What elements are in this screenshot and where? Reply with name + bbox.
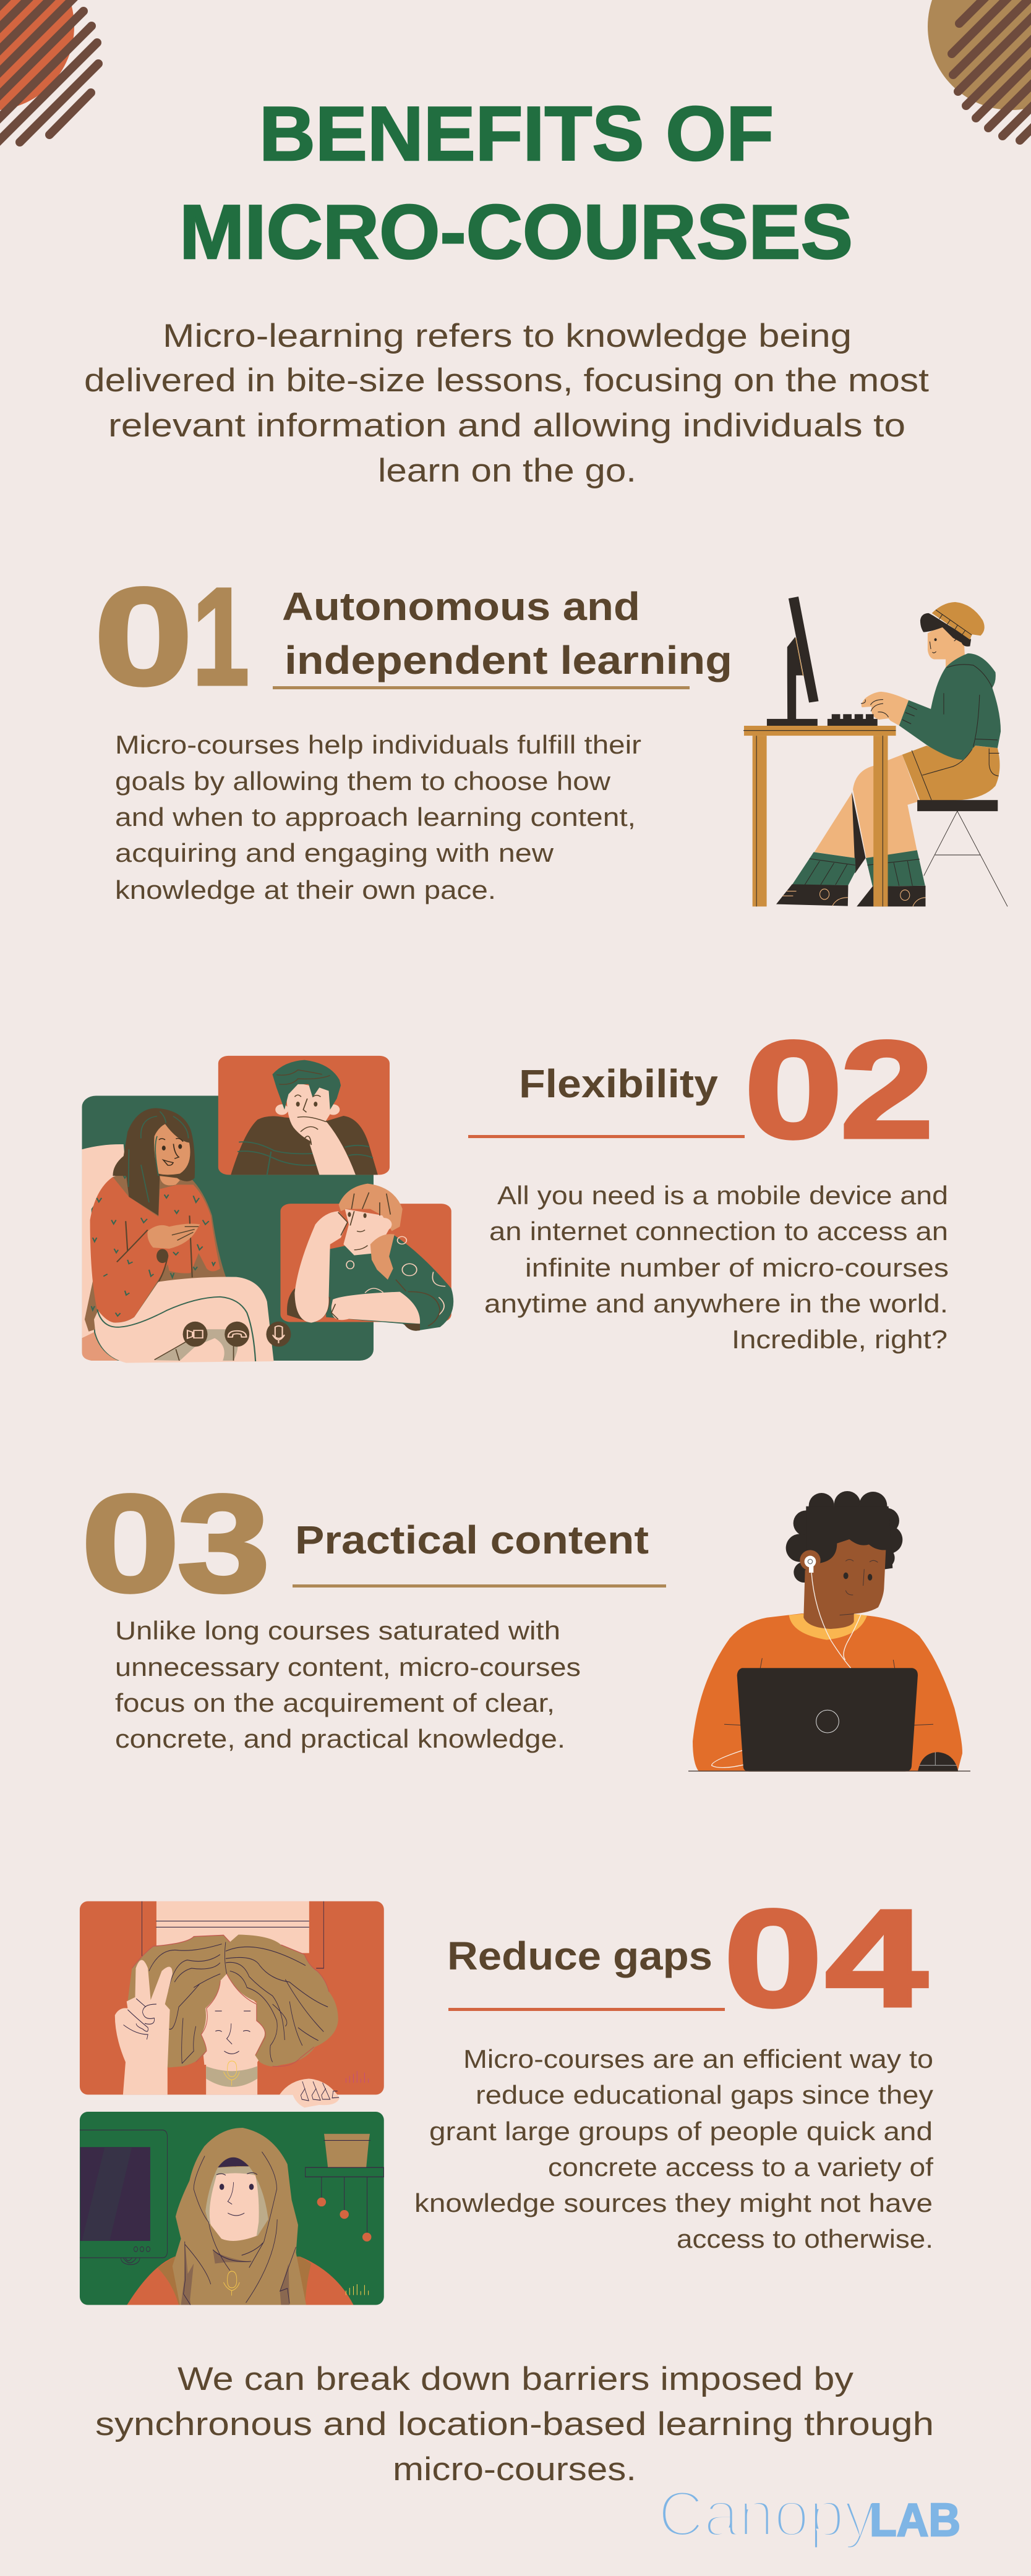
section 01: heading bbox=[273, 584, 732, 689]
section 04: heading bbox=[447, 1934, 725, 2011]
illustration: two people on video calls bbox=[80, 1901, 384, 2305]
section 03: body text bbox=[115, 1616, 581, 1753]
section 01: body text: and when to approach learning content, bbox=[115, 802, 636, 831]
intro text: relevant information and allowing individuals to bbox=[108, 407, 905, 444]
section 02: body text: anytime and anywhere in the world. bbox=[484, 1289, 948, 1318]
section 02: number: 2 bbox=[840, 1013, 934, 1167]
section 02: body text: infinite number of micro-courses bbox=[525, 1253, 949, 1282]
section 01: body text: goals by allowing them to choose how bbox=[115, 767, 611, 796]
conclusion text: We can break down barriers imposed by bbox=[178, 2361, 854, 2397]
section 01: body text: acquiring and engaging with new bbox=[115, 838, 554, 867]
section 01: body text: Micro-courses help individuals fulfill their bbox=[115, 730, 641, 759]
illustration: person typing at a desk bbox=[743, 597, 1007, 906]
section 03: body text: focus on the acquirement of clear, bbox=[115, 1688, 555, 1717]
section 04: number bbox=[724, 1881, 928, 2036]
section 03: body text: concrete, and practical knowledge. bbox=[115, 1724, 565, 1753]
section 03: number bbox=[81, 1466, 270, 1621]
section 02: number bbox=[744, 1013, 934, 1167]
section 04: body text: access to otherwise. bbox=[677, 2224, 933, 2253]
section 03: heading bbox=[293, 1518, 666, 1588]
panel: top call bbox=[80, 1901, 384, 2107]
intro text bbox=[84, 318, 929, 489]
illustration: video call with three people bbox=[82, 1056, 453, 1363]
section 04: number: 4 bbox=[825, 1881, 928, 2036]
title: MICRO-COURSES bbox=[179, 190, 853, 275]
conclusion text: micro-courses. bbox=[393, 2451, 636, 2488]
section 03: heading: Practical content bbox=[295, 1518, 649, 1562]
section 02: body text: an internet connection to access an bbox=[489, 1217, 948, 1246]
icon: mic bbox=[223, 2271, 239, 2295]
conclusion text bbox=[95, 2361, 934, 2488]
illustration: person with earphones at a laptop bbox=[688, 1491, 970, 1772]
section 01: number bbox=[94, 559, 249, 714]
decoration: top-right circle with stripes bbox=[928, 0, 1031, 140]
section 04: body text: grant large groups of people quick and bbox=[429, 2117, 933, 2146]
section 01: body text bbox=[115, 730, 641, 904]
section 01: body text: knowledge at their own pace. bbox=[115, 875, 496, 904]
section 02: heading: Flexibility bbox=[519, 1061, 718, 1106]
section 02: number: 0 bbox=[744, 1013, 843, 1167]
section 02: heading bbox=[468, 1061, 745, 1138]
section 04: body text bbox=[414, 2044, 933, 2253]
section 01: heading: independent learning bbox=[284, 638, 732, 682]
section 03: number: 0 bbox=[81, 1466, 180, 1621]
section 02: body text: All you need is a mobile device and bbox=[497, 1181, 948, 1210]
section 02: body text: Incredible, right? bbox=[732, 1325, 948, 1354]
intro text: Micro-learning refers to knowledge being bbox=[163, 318, 852, 354]
call control icons bbox=[183, 1322, 291, 1347]
conclusion text: synchronous and location-based learning through bbox=[95, 2406, 934, 2442]
section 04: body text: reduce educational gaps since they bbox=[476, 2080, 933, 2109]
section 02: body text bbox=[484, 1181, 949, 1354]
section 04: body text: concrete access to a variety of bbox=[548, 2153, 933, 2182]
section 01: heading: Autonomous and bbox=[282, 584, 640, 629]
section 04: body text: knowledge sources they might not have bbox=[414, 2188, 933, 2217]
panel: bottom call bbox=[80, 2112, 384, 2305]
section 04: number: 0 bbox=[724, 1881, 823, 2036]
section 04: heading: Reduce gaps bbox=[447, 1934, 712, 1978]
section 03: number: 3 bbox=[177, 1466, 270, 1621]
section 04: body text: Micro-courses are an efficient way to bbox=[463, 2044, 933, 2073]
title: BENEFITS OF bbox=[259, 91, 774, 177]
section 01: number: 1 bbox=[192, 559, 249, 714]
section 03: body text: Unlike long courses saturated with bbox=[115, 1616, 560, 1645]
decoration: top-left circle with stripes bbox=[0, 0, 98, 152]
intro text: learn on the go. bbox=[378, 453, 636, 489]
icon: mic bbox=[223, 2061, 239, 2086]
logo: CanopyLAB: LAB bbox=[870, 2494, 960, 2546]
title bbox=[179, 91, 853, 275]
section 03: body text: unnecessary content, micro-courses bbox=[115, 1652, 581, 1681]
logo: CanopyLAB: Canopy bbox=[658, 2478, 876, 2550]
section 01: number: 0 bbox=[94, 559, 193, 714]
intro text: delivered in bite-size lessons, focusing on the most bbox=[84, 362, 929, 399]
